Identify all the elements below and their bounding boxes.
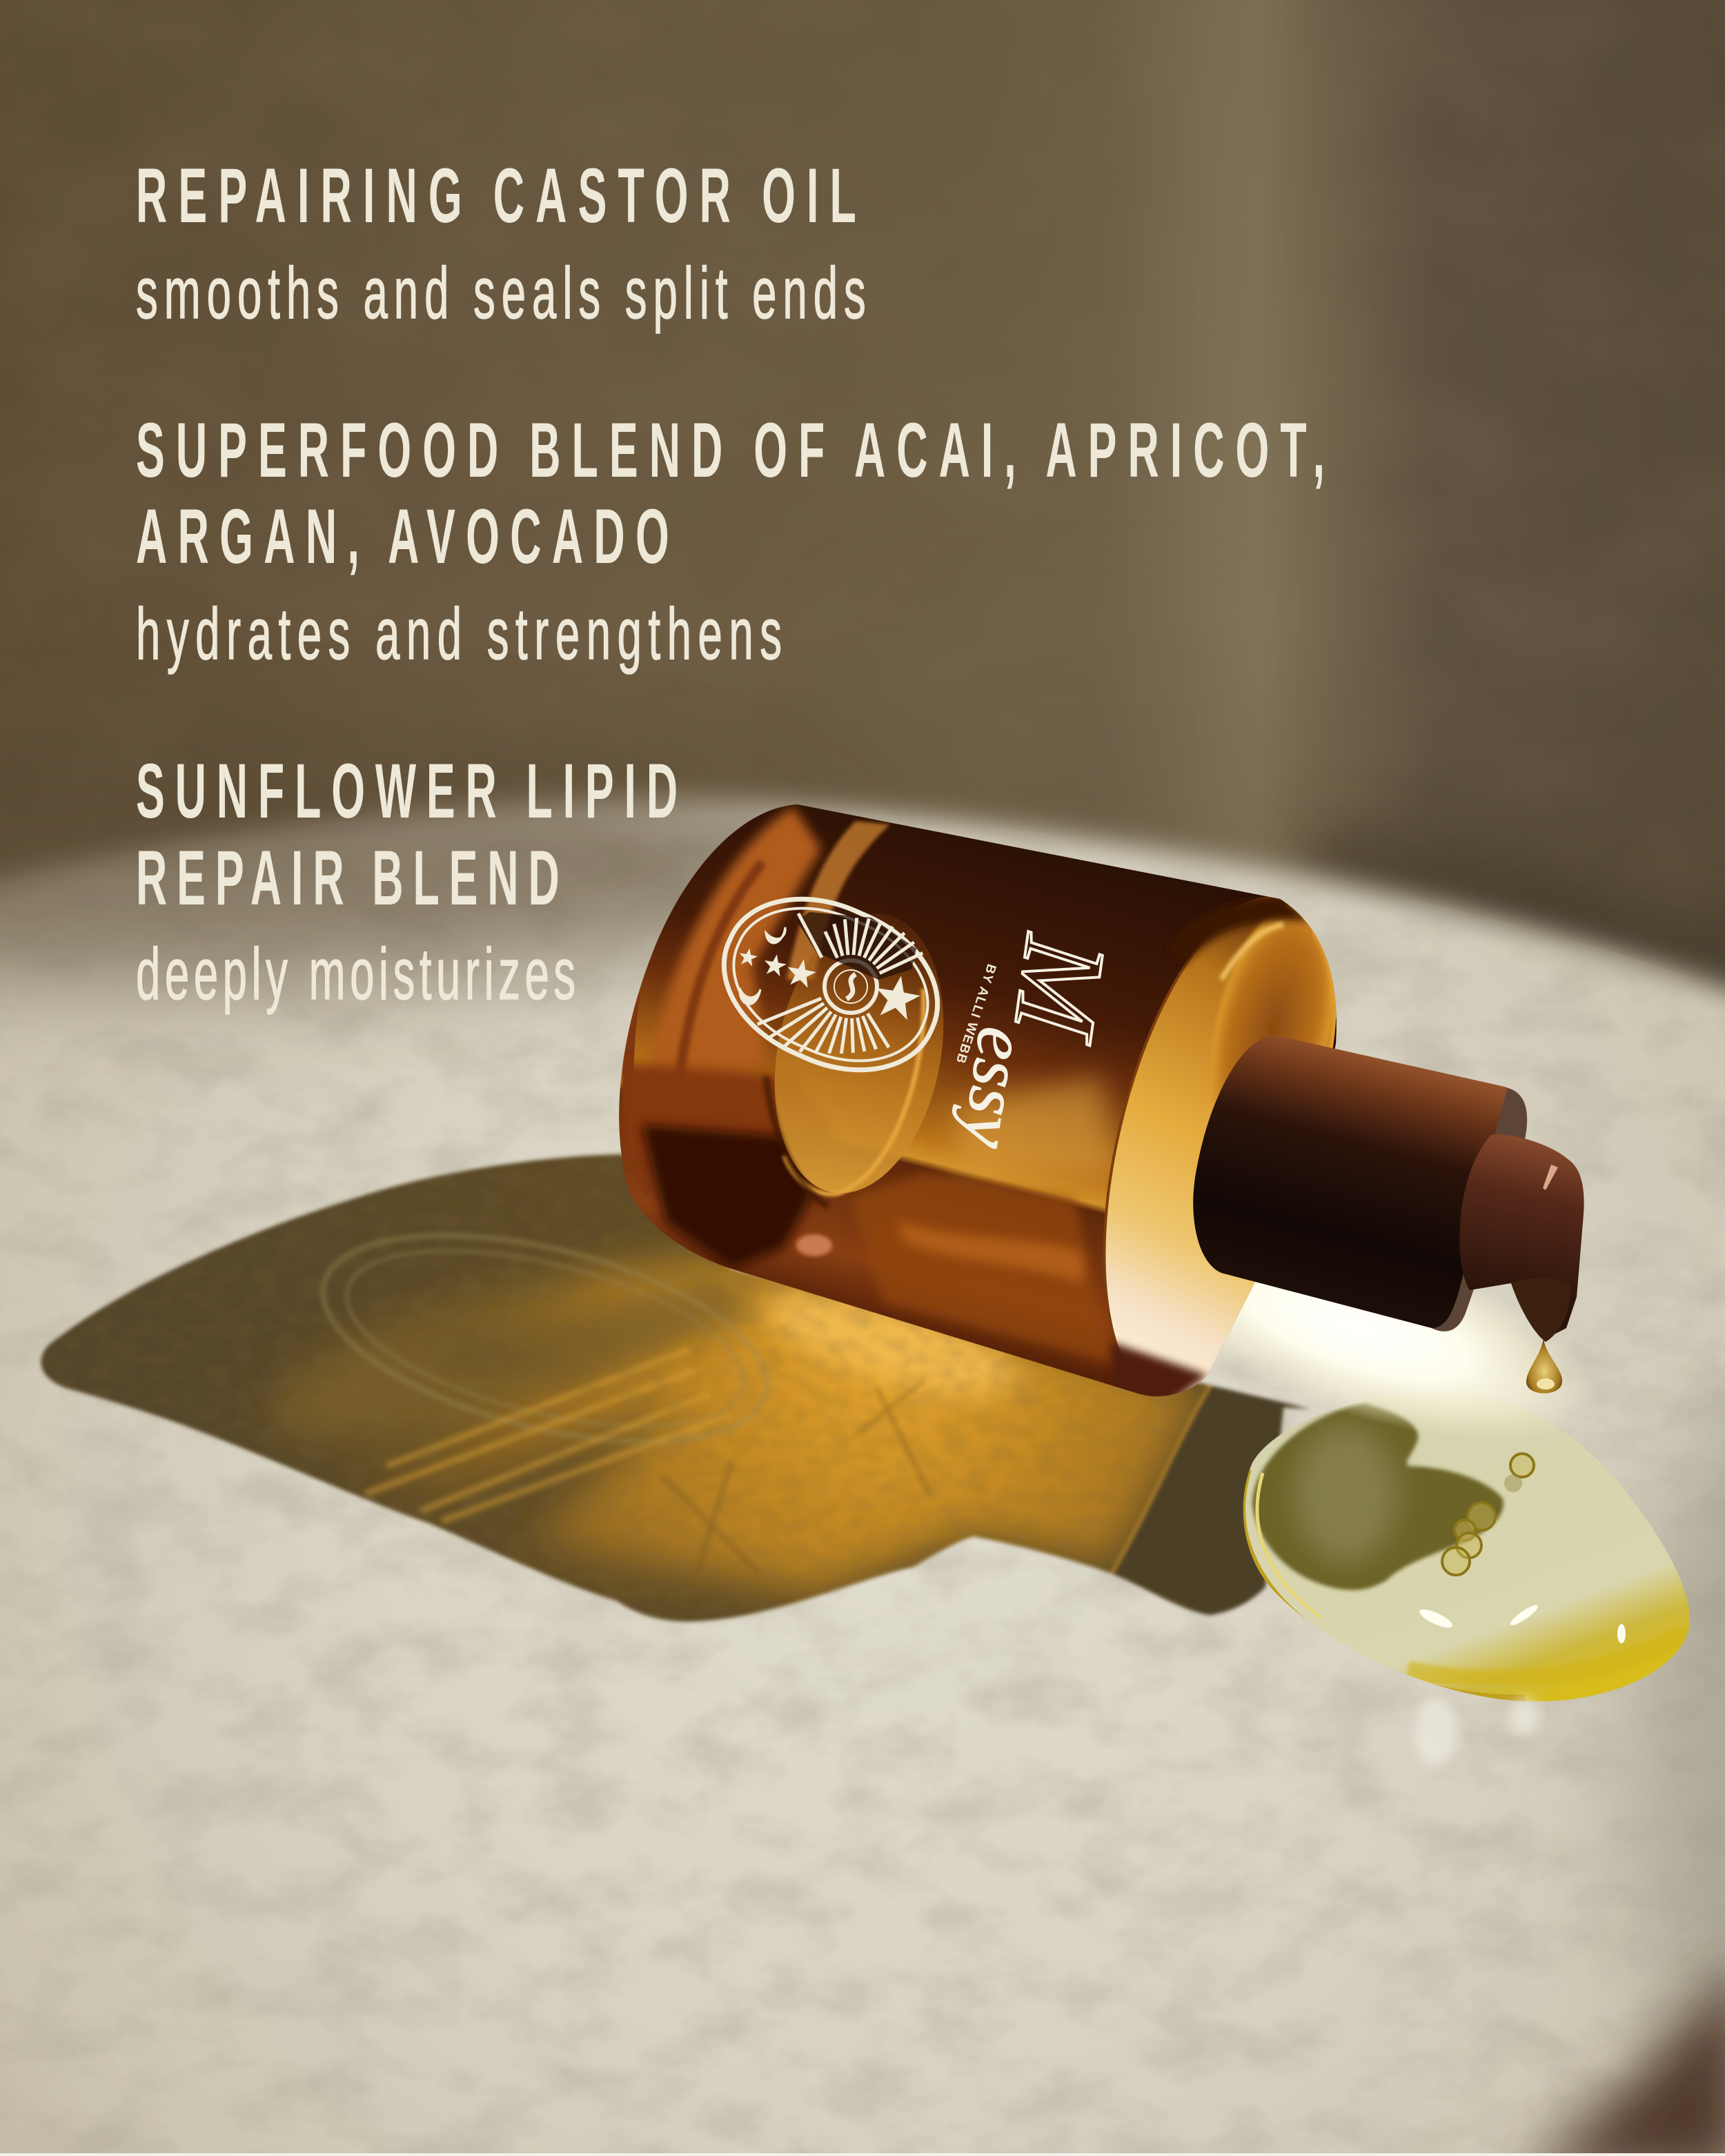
pink spark [796,1234,832,1256]
oil puddle [1241,1392,1690,1766]
inner dish of the bottle base [752,899,966,1208]
bottom dark tip [1111,1342,1208,1407]
ingredient: repairing castor oil [136,153,866,334]
glow beneath the pump [1096,1169,1622,1487]
dark lower-left zone [642,1125,818,1269]
cast shadow with amber caustics [38,1151,1310,1625]
logo caustic marks [662,1380,931,1573]
bubbles [1442,1454,1534,1575]
caustic ring of the label [319,1232,771,1445]
bottle body [619,804,1337,1396]
left rim glow [648,807,821,1166]
benefit: deeply moisturizes [136,933,575,1015]
shadow seen through the oil [1252,1403,1504,1590]
reflections under puddle [1414,1697,1539,1766]
specular highlights [1417,1602,1626,1643]
brand script: M [989,929,1132,1044]
collar end ring [1432,1088,1527,1332]
ingredient: superfood blend [136,408,1325,675]
benefit: smooths and seals split ends [136,252,866,334]
ingredient: sunflower lipid repair blend: REPAIR BLEND [136,835,560,922]
pump nozzle [1459,1134,1584,1340]
oil drip and droplet [1511,1278,1570,1394]
medallion stars and moons [738,927,923,1022]
brand script: essy [948,1022,1045,1154]
medallion label [698,869,963,1100]
mid brown band over base [621,1062,835,1173]
heading: SUPERFOOD BLEND OF ACAI, APRICOT, [136,408,1325,494]
lower red-brown reflection [851,1173,1121,1365]
benefit: hydrates and strengthens [136,593,782,675]
ingredient: sunflower lipid repair blend [136,749,678,1015]
brand byline: BY ALLI WEBB [953,962,998,1065]
heading: SUNFLOWER LIPID [136,749,678,835]
medallion sun and rays [758,912,923,1054]
nozzle highlight [1543,1165,1558,1190]
amber glass bottle [619,804,1584,1423]
shoulder ring [1061,875,1381,1423]
background: lit stone floor [0,745,1725,2156]
gold patch in the glass [956,1076,1118,1177]
heading: REPAIRING CASTOR OIL [136,153,856,239]
ingredient: superfood blend: ARGAN, AVOCADO [136,494,669,580]
caustic streaks [366,1349,731,1521]
pump collar [1193,1035,1527,1332]
